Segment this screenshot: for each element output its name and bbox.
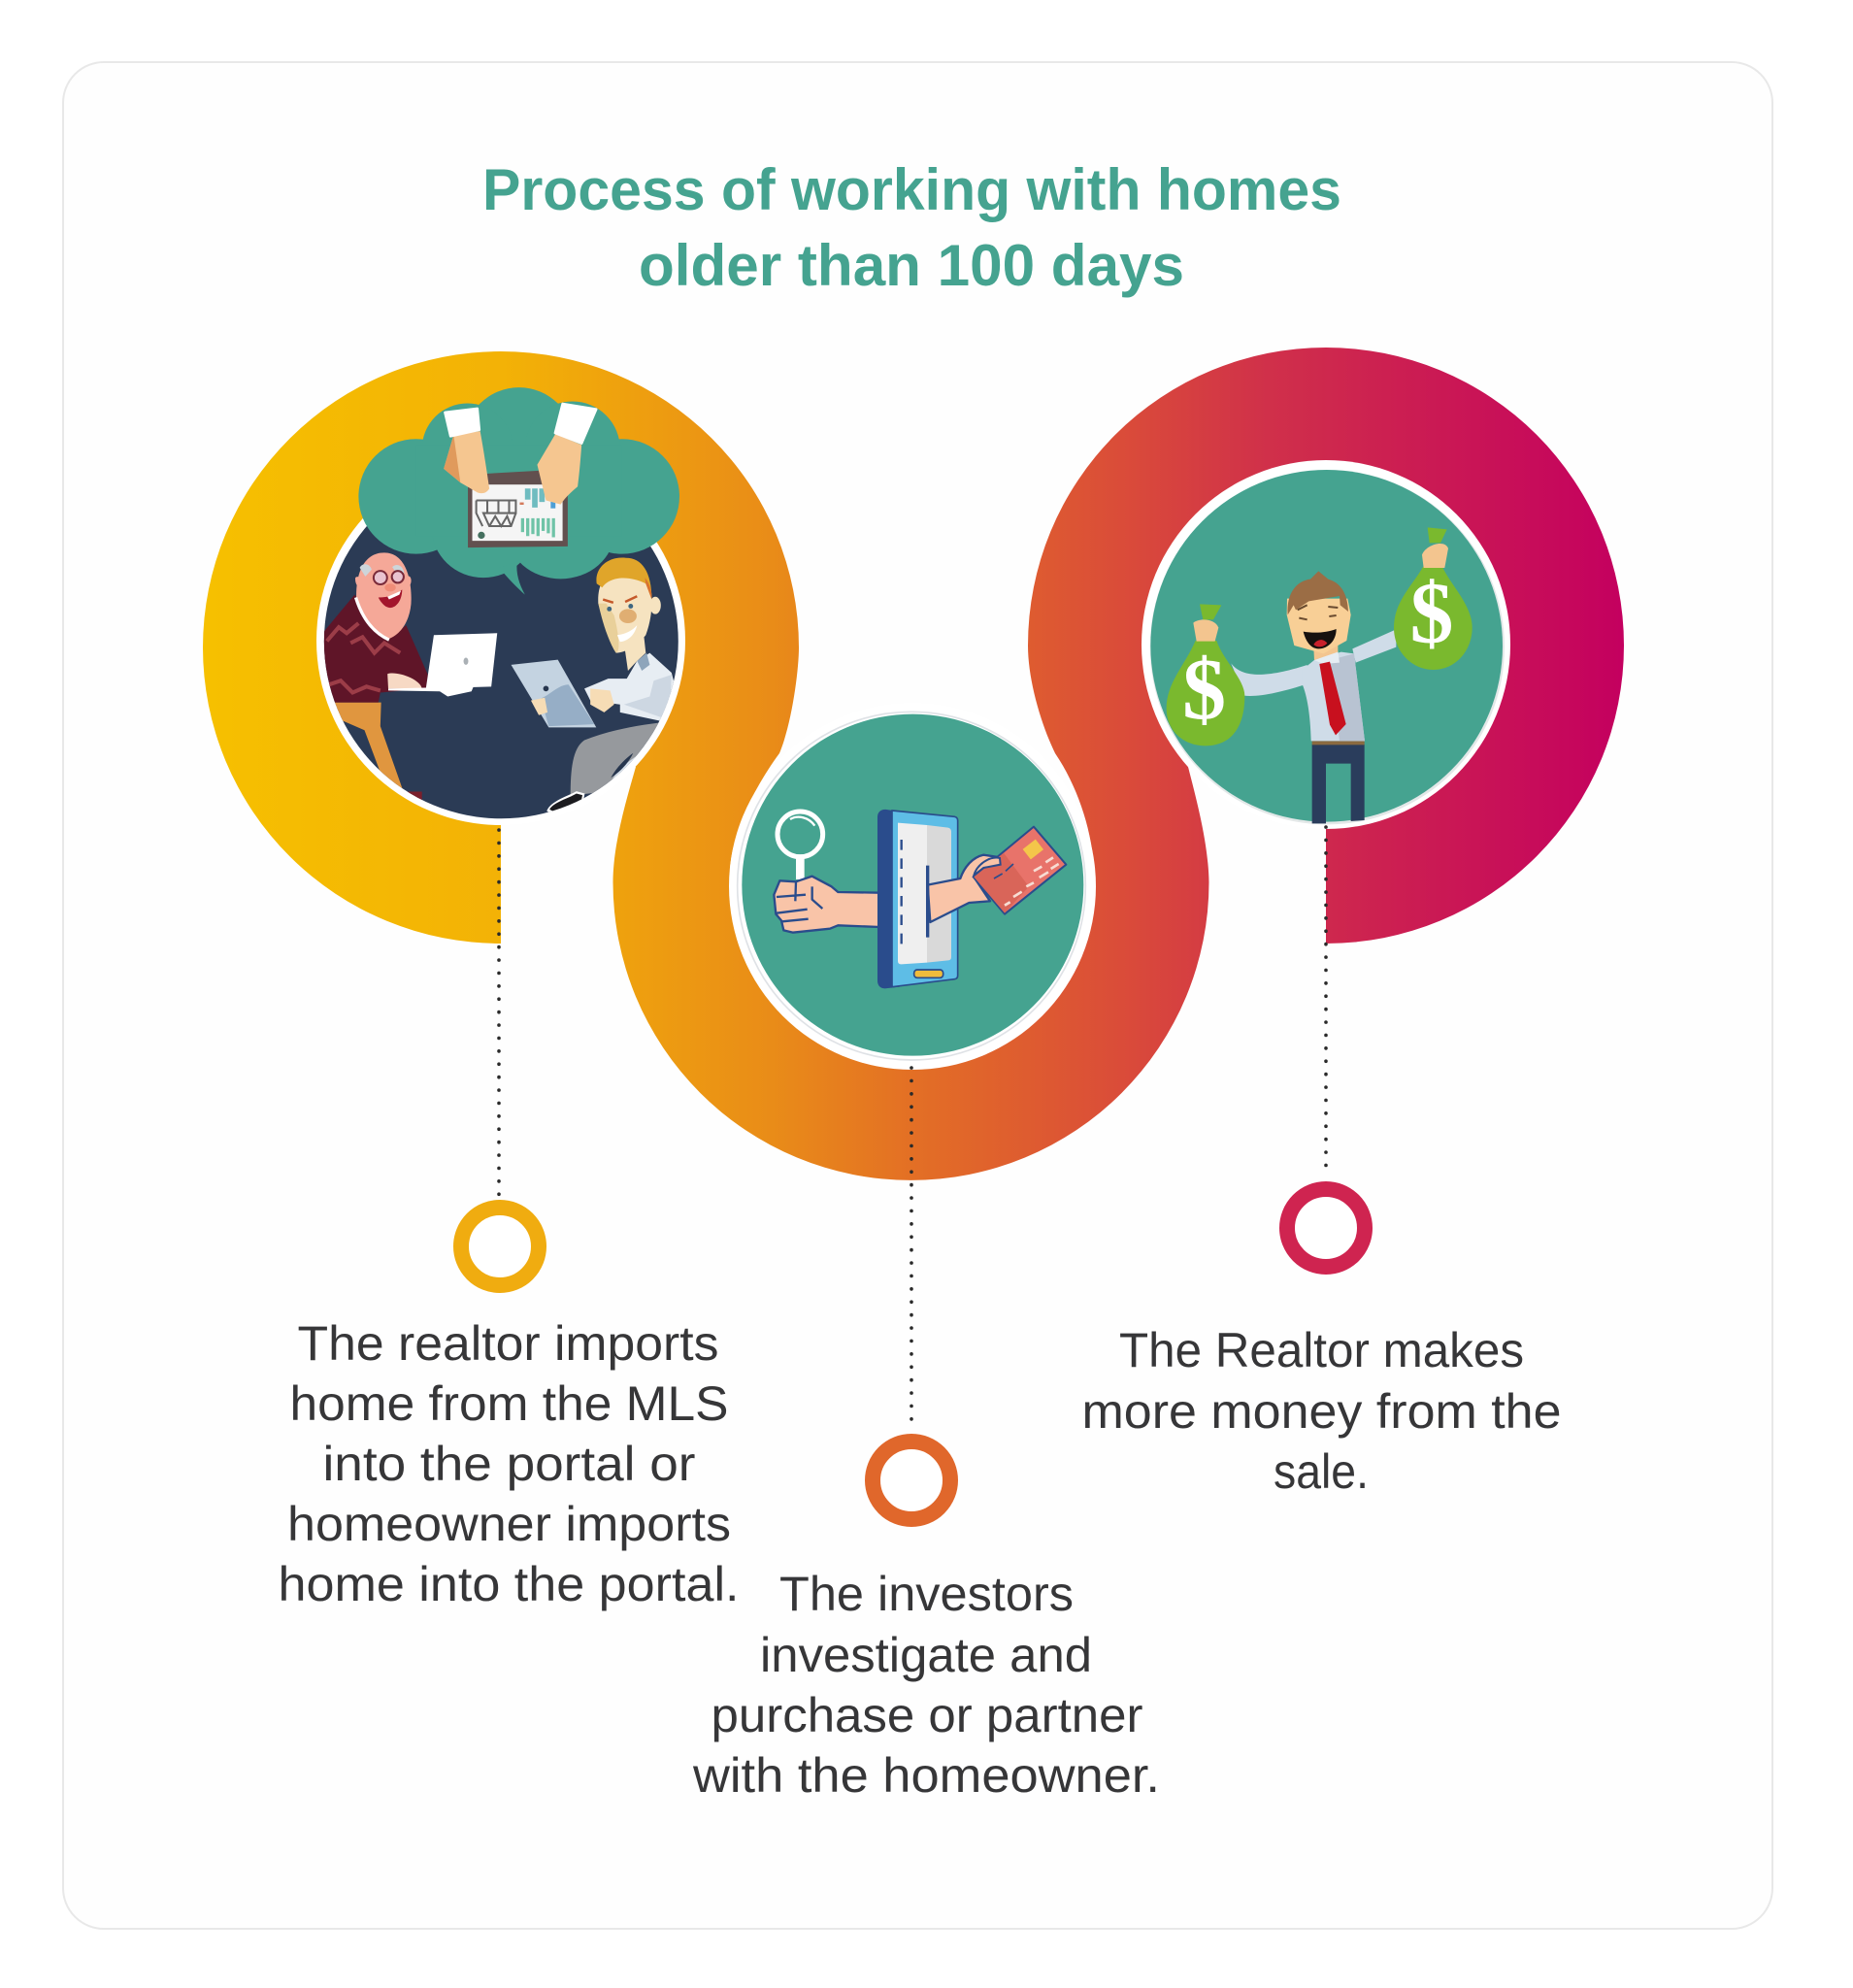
right money bag — [1394, 527, 1472, 670]
eyes — [1298, 605, 1338, 619]
left arm and fist — [774, 877, 880, 933]
young man pants — [571, 722, 658, 794]
white notch above middle disc — [730, 753, 1094, 869]
hair — [596, 557, 651, 600]
text: step 1: The realtor imports — [297, 1316, 718, 1371]
marker ring step 1 — [461, 1208, 539, 1285]
phone side — [877, 810, 900, 988]
ears and hair — [355, 576, 412, 585]
navy scene — [324, 526, 678, 819]
title — [482, 157, 1341, 298]
left money bag — [1167, 604, 1244, 746]
tablet on table — [468, 471, 568, 547]
gradient ribbon — [203, 348, 1624, 1180]
old man shoe — [408, 792, 422, 800]
white disc: step 2 — [729, 703, 1096, 1070]
right arm — [928, 855, 1000, 922]
right cuff — [555, 404, 596, 444]
text: step 2: investigate and — [760, 1628, 1092, 1682]
mouth — [1304, 629, 1337, 648]
old man head — [356, 552, 412, 639]
text: step 3: The Realtor makes — [1119, 1323, 1524, 1377]
phone button — [914, 970, 943, 977]
marker ring step 2 — [873, 1441, 950, 1519]
connector step 1 — [497, 830, 501, 1217]
nose — [384, 583, 396, 591]
sweater — [321, 595, 428, 703]
card dashes — [1005, 857, 1059, 906]
credit card — [974, 827, 1066, 914]
fingers on card — [974, 858, 1001, 876]
young man head — [598, 572, 652, 653]
belt — [1312, 741, 1365, 745]
laptop — [426, 633, 497, 688]
old man hand — [387, 674, 422, 688]
left money bag: $ — [1182, 642, 1226, 738]
collar — [356, 598, 389, 640]
right money bag: $ — [1409, 566, 1453, 662]
right arm — [1352, 629, 1396, 663]
title: older than 100 days — [639, 233, 1184, 298]
white disc: step 3 — [1142, 460, 1510, 829]
sweater pattern — [327, 623, 400, 692]
collar — [1314, 651, 1340, 664]
bars top — [525, 488, 545, 508]
step 1 illustration: meeting — [316, 387, 685, 825]
tablet hand — [531, 698, 547, 715]
text: step 2: purchase or partner — [711, 1688, 1143, 1742]
left arm — [1231, 663, 1308, 696]
young man shoe — [546, 791, 584, 814]
torso — [1303, 652, 1365, 741]
collar — [637, 653, 649, 671]
text: step 3 — [1081, 1323, 1561, 1499]
old man chair — [335, 703, 402, 788]
text: step 3: more money from the — [1081, 1384, 1561, 1439]
step 2 illustration: investigate and purchase — [729, 703, 1096, 1070]
text: step 1: home from the MLS — [289, 1376, 728, 1431]
text: step 1: homeowner imports — [287, 1497, 731, 1551]
dashes — [898, 840, 905, 949]
mouth — [379, 589, 402, 608]
floor plan — [477, 501, 515, 526]
soft shadow — [1150, 470, 1505, 824]
connector step 3 — [1324, 827, 1328, 1170]
thought cloud — [358, 387, 679, 595]
hand — [590, 688, 614, 712]
tie — [1319, 662, 1346, 735]
chair detail — [612, 757, 635, 779]
marker ring step 3 — [1287, 1189, 1365, 1267]
left cuff — [445, 409, 480, 436]
head — [1287, 599, 1351, 653]
text: step 1 — [278, 1316, 740, 1611]
text: step 3: sale. — [1274, 1444, 1369, 1499]
ear — [649, 597, 661, 614]
hair — [1288, 571, 1348, 614]
left hand — [444, 431, 489, 493]
text: step 2: with the homeowner. — [692, 1748, 1160, 1803]
connector step 2 — [910, 1068, 913, 1427]
right hand — [537, 434, 581, 505]
text: step 2 — [692, 1567, 1160, 1803]
teal disc — [1150, 470, 1503, 822]
phone slot — [923, 866, 933, 938]
bars bottom — [521, 518, 555, 537]
step 3 illustration: realtor with money — [1142, 460, 1510, 829]
title: Process of working with homes — [482, 157, 1341, 222]
tablet — [512, 660, 596, 727]
text: step 2: The investors — [779, 1567, 1074, 1621]
young man shirt — [584, 652, 674, 720]
magnifier — [778, 812, 823, 879]
man legs — [1312, 745, 1365, 823]
face details — [603, 596, 637, 603]
phone screen — [898, 823, 927, 964]
teal disc — [742, 714, 1083, 1056]
thin ring — [738, 712, 1085, 1060]
neck — [1313, 641, 1338, 660]
phone body — [892, 811, 958, 987]
chip — [1023, 840, 1043, 859]
white disc: step 1 — [316, 456, 685, 825]
glasses — [374, 571, 404, 584]
neck — [625, 637, 646, 671]
text: step 1: home into the portal. — [278, 1557, 740, 1611]
text: step 1: into the portal or — [322, 1437, 695, 1491]
